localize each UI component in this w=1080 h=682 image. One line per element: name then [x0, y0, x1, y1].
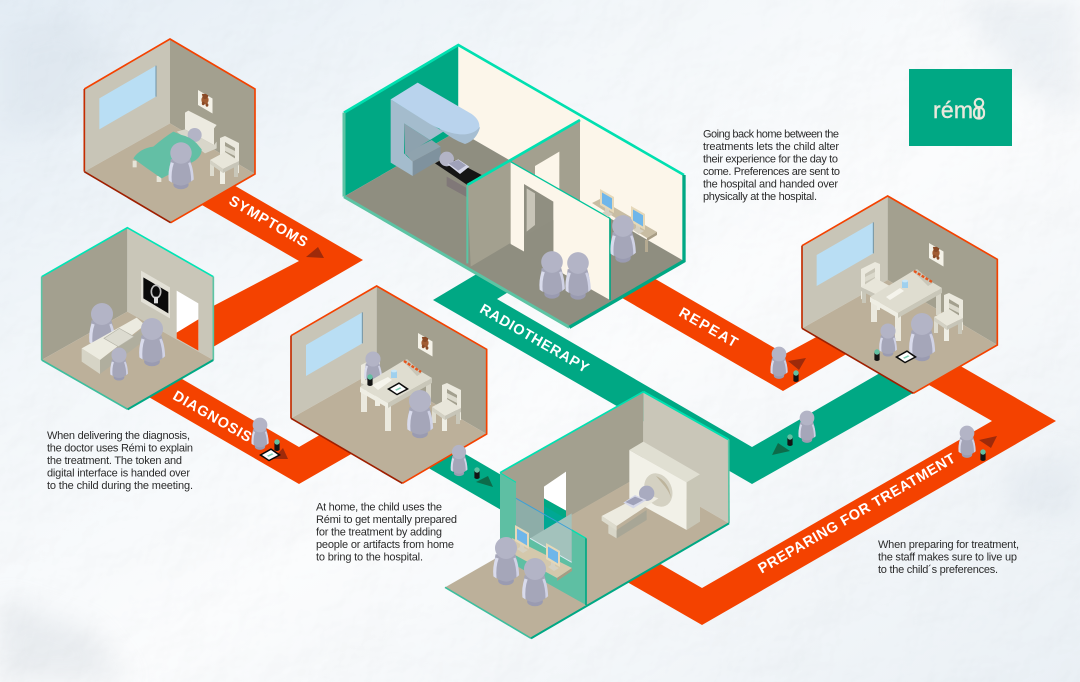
panel: MRI preparation room	[445, 392, 729, 638]
figure: child with token on home road	[451, 445, 480, 479]
person: parent	[909, 313, 935, 361]
text: diagnosis description: digital interface is handed over	[47, 468, 190, 480]
table items	[367, 359, 422, 395]
label: diagnosis: DIAGNOSIS	[170, 388, 254, 446]
logo: Rémi: rém	[933, 97, 973, 123]
arrow: repeat	[788, 358, 806, 370]
arrow: back to home	[772, 443, 790, 455]
text: repeat description: the hospital and handed over	[703, 178, 838, 190]
person: radiographer	[610, 215, 636, 263]
road: home to hospital	[425, 448, 515, 518]
icon: tablet	[895, 350, 917, 363]
label: repeat: REPEAT	[676, 305, 740, 351]
chair right	[432, 383, 461, 431]
text: home description: people or artifacts from home	[316, 539, 454, 551]
figure: child with token on return road	[787, 411, 816, 446]
arrow: home to hospital	[476, 476, 493, 487]
road: symptoms	[177, 180, 363, 347]
arrow: diagnosis	[273, 448, 288, 459]
person: radiographer	[493, 537, 519, 585]
figure: child with token on diagnosis road	[251, 418, 281, 461]
road: radiotherapy	[433, 272, 913, 484]
arrow: symptoms	[306, 247, 324, 258]
text: preparing description	[878, 539, 1019, 576]
logo: Rémi	[909, 69, 1012, 146]
road: repeat	[610, 273, 850, 391]
label: preparing for treatment: PREPARING FOR TREATMENT	[756, 451, 959, 577]
icon: bear picture	[198, 90, 212, 114]
person: parent	[407, 390, 433, 438]
arrow: preparing	[979, 436, 997, 448]
text: diagnosis description	[47, 430, 193, 492]
text: preparing description: When preparing for treatment,	[878, 539, 1019, 551]
person: parent	[565, 252, 591, 300]
MRI scanner	[602, 442, 700, 538]
panel: symptoms bedroom	[84, 39, 255, 223]
road: diagnosis	[140, 372, 360, 484]
road: preparing for treatment	[615, 360, 1056, 625]
panel: home room after treatment	[802, 196, 997, 393]
icon: token	[874, 349, 880, 361]
control desk	[592, 189, 657, 252]
text: home description: At home, the child uses the	[316, 502, 442, 514]
bed	[133, 111, 217, 182]
person: parent	[522, 558, 548, 606]
person: child	[879, 323, 897, 357]
text: preparing description: the staff makes sure to live up	[878, 552, 1017, 564]
panel: radiotherapy room	[344, 45, 684, 327]
person: child	[110, 347, 128, 381]
text: repeat description	[703, 128, 840, 203]
partition wall	[467, 120, 580, 267]
panel: diagnosis office	[42, 228, 213, 409]
chair left	[361, 358, 390, 406]
icon: bear picture	[929, 243, 944, 266]
text: home description: for the treatment by adding	[316, 526, 442, 538]
icon: bear picture	[418, 333, 432, 356]
table items	[886, 269, 933, 300]
text: repeat description: treatments lets the child alter	[703, 141, 839, 153]
panel: home preparation room	[291, 286, 487, 483]
text: home description	[316, 502, 457, 564]
person: parent	[139, 318, 165, 366]
chair	[210, 136, 239, 184]
text: diagnosis description: the treatment. The token and	[47, 455, 182, 467]
chair right	[934, 293, 963, 341]
person: doctor	[89, 303, 115, 351]
person: parent	[169, 142, 194, 189]
desk	[82, 318, 145, 374]
person: child	[539, 251, 565, 299]
text: repeat description: come. Preferences are sent to	[703, 166, 840, 178]
glass control wall	[445, 473, 729, 638]
label: symptoms: SYMPTOMS	[226, 193, 310, 251]
text: diagnosis description: to the child during the meeting.	[47, 480, 193, 492]
control desk	[512, 525, 572, 581]
treatment couch	[435, 152, 482, 197]
table	[870, 271, 942, 341]
linear accelerator	[391, 83, 480, 176]
label: radiotherapy: RADIOTHERAPY	[477, 301, 592, 377]
table	[360, 361, 432, 431]
text: repeat description: physically at the hospital.	[703, 191, 817, 203]
figure: child with token on preparing road	[958, 426, 986, 461]
cream wall with door	[511, 162, 610, 300]
text: preparing description: to the child´s preferences.	[878, 564, 998, 576]
text: repeat description: Going back home between the	[703, 128, 839, 140]
figure: child with token on repeat road	[770, 347, 799, 382]
person: child	[364, 351, 382, 385]
text: diagnosis description: the doctor uses Rémi to explain	[47, 442, 193, 454]
text: home description: to bring to the hospital.	[316, 552, 423, 564]
chair left	[861, 262, 890, 310]
text: diagnosis description: When delivering the diagnosis,	[47, 430, 190, 442]
text: repeat description: their experience for the day to	[703, 154, 838, 166]
text: home description: Rémi to get mentally prepared	[316, 514, 457, 526]
